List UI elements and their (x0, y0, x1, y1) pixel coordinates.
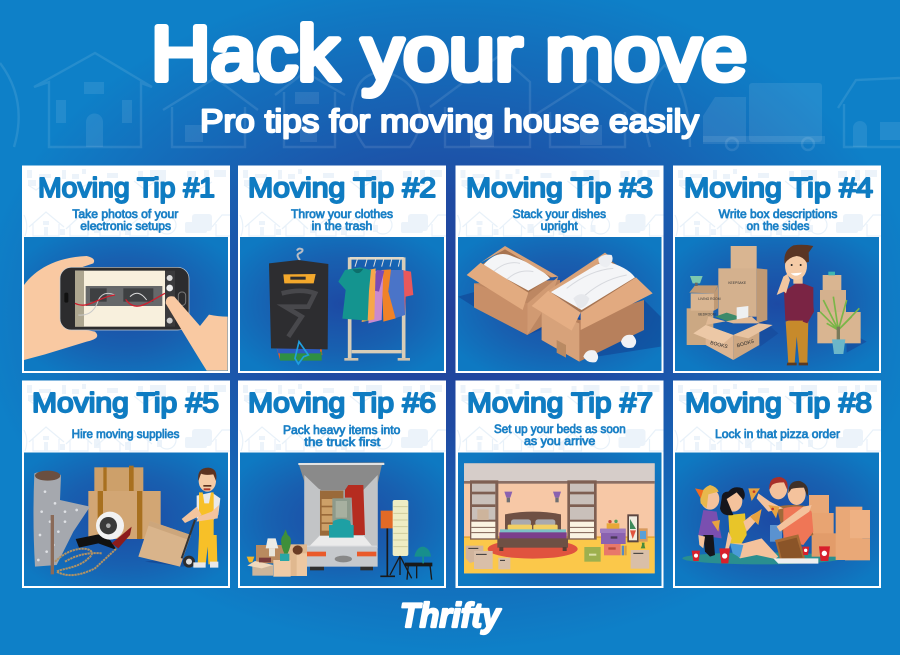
illustration: truck, furniture and boxes (247, 462, 432, 580)
header watermark (240, 384, 446, 451)
illustration background (458, 237, 662, 371)
panel: moving tip 6 (238, 380, 446, 588)
tip text: Hire moving supplies (72, 429, 180, 441)
tip text: in the trash (312, 221, 372, 233)
heading: Moving Tip #4 (684, 172, 873, 203)
panel: moving tip 8 (673, 380, 881, 588)
illustration: trash bag and clothes rack (269, 249, 413, 364)
illustration: friends eating pizza (682, 477, 870, 564)
panel: moving tip 4 (673, 166, 881, 373)
illustration: labelled boxes and thinking man: BEDROOM (824, 292, 841, 296)
illustration background (240, 237, 444, 371)
card (238, 380, 446, 588)
heading: Moving Tip #3 (466, 172, 653, 203)
illustration: labelled boxes and thinking man: BOOKS (736, 338, 756, 349)
illustration background (24, 237, 228, 371)
title: Hack your move (151, 11, 747, 97)
illustration: labelled boxes and thinking man: BOOKS (710, 340, 729, 350)
panel: moving tip 5 (22, 380, 230, 588)
illustration: labelled boxes and thinking man: KEEPSAKE (728, 281, 747, 285)
tip text: Lock in that pizza order (715, 429, 840, 441)
card (22, 166, 230, 373)
illustration: labelled boxes and thinking man: TOYS (823, 323, 833, 327)
card (673, 380, 881, 588)
panel: moving tip 7 (456, 380, 664, 588)
subtitle: Pro tips for moving house easily (200, 103, 699, 139)
tip text: the truck first (304, 437, 381, 449)
panel: moving tip 3 (456, 166, 664, 373)
illustration: bedroom (464, 463, 655, 573)
panel: moving tip 1 (22, 166, 230, 373)
illustration: labelled boxes and thinking man (687, 245, 867, 365)
header watermark (24, 384, 230, 451)
illustration: moving supplies and worker (33, 466, 220, 575)
tip text: as you arrive (524, 436, 595, 448)
illustration background (675, 237, 879, 371)
heading: Moving Tip #5 (32, 387, 219, 418)
illustration: two boxes of dishes (458, 246, 661, 362)
header watermark (240, 169, 446, 236)
card (22, 380, 230, 588)
heading: Moving Tip #8 (685, 387, 872, 418)
card (456, 380, 664, 588)
header watermark (24, 169, 230, 236)
header watermark (675, 384, 881, 451)
background houses and truck (0, 53, 900, 150)
tip text: upright (541, 221, 579, 233)
card (238, 166, 446, 373)
header watermark (458, 169, 664, 236)
tip text: Pack heavy items into (283, 425, 400, 437)
illustration background (24, 452, 228, 586)
heading: Moving Tip #6 (248, 387, 436, 418)
illustration: labelled boxes and thinking man: BEDROOM (698, 312, 716, 316)
card (456, 166, 664, 373)
illustration background (240, 452, 444, 586)
tip text: Stack your dishes (513, 209, 606, 221)
tip text: on the sides (747, 221, 810, 233)
header watermark (675, 169, 881, 236)
heading: Moving Tip #2 (248, 172, 436, 203)
heading: Moving Tip #7 (467, 387, 653, 418)
illustration background (458, 452, 662, 586)
panel: moving tip 2 (238, 166, 446, 373)
tip text: Set up your beds as soon (494, 424, 626, 436)
heading: Moving Tip #1 (38, 172, 215, 203)
header watermark (458, 384, 664, 451)
tip text: Take photos of your (72, 209, 178, 221)
illustration: phone held in hands (24, 256, 228, 371)
illustration background (675, 452, 879, 586)
logo: Thrifty: Thrifty (400, 597, 502, 635)
tip text: Write box descriptions (719, 209, 838, 221)
tip text: Throw your clothes (291, 209, 393, 221)
illustration: labelled boxes and thinking man: LIVING ROOM (698, 297, 721, 301)
tip text: electronic setups (80, 221, 171, 233)
card (673, 166, 881, 373)
